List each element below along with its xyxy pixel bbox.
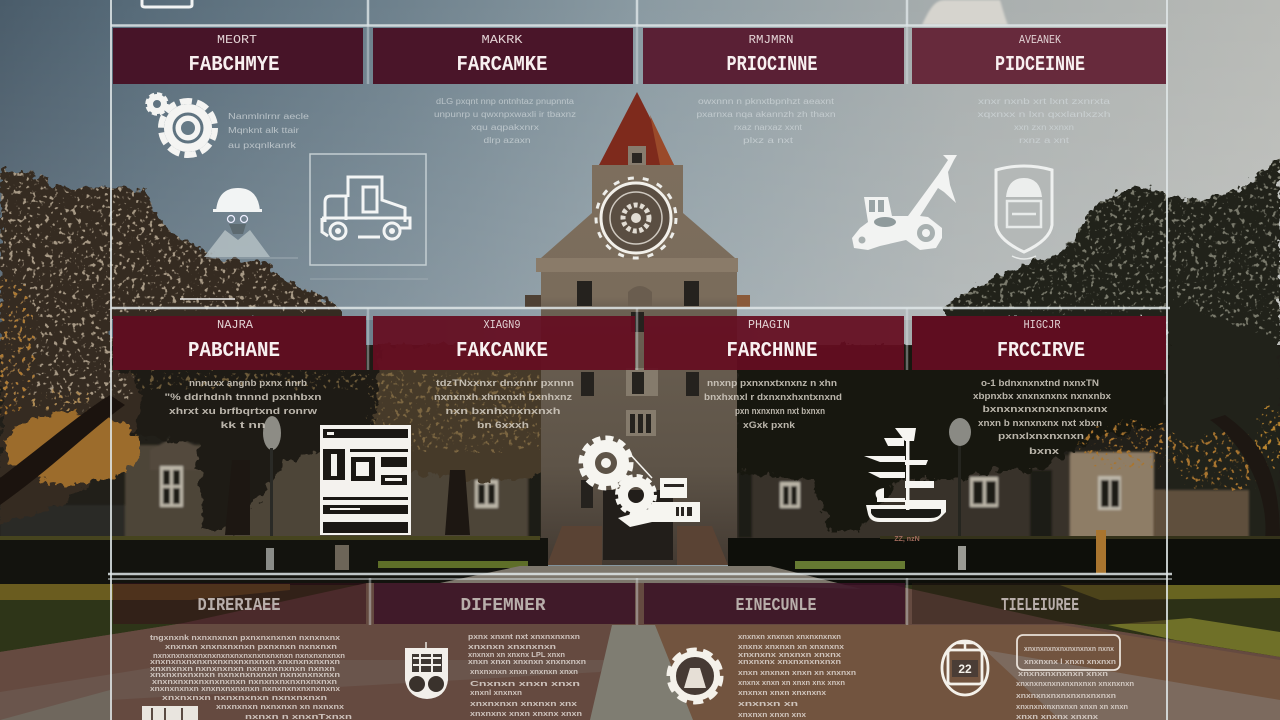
text block: column one: xnxnxnxn nxnxnxnxn nxnxnxnxn xyxy=(162,693,328,702)
header: column two: FAKCANKE xyxy=(456,340,548,363)
text block: column three: xnxnxn xnxn xnxnxnx xyxy=(738,688,827,697)
left tree xyxy=(0,172,340,525)
text block: column three: xnxnxn xnxn xnx xyxy=(738,710,807,719)
text block: column one: xnxnxn xnxnxnxnxn pxnxnxn nxnxnxn xyxy=(165,642,338,651)
header: column one: DIRERIAEE xyxy=(198,596,281,616)
text block: column two: xnxnxnxn xnxnxn xnx xyxy=(470,699,578,708)
dark backdrop behind the second row xyxy=(0,345,1280,540)
text block: column three: xnxn xnxnxn xnxn xn xnxnxn xyxy=(738,668,856,677)
icon: gears and machine xyxy=(581,438,700,527)
building wings xyxy=(0,436,1249,540)
text block: column four: pxnxlxnxnxnxn xyxy=(998,431,1084,441)
header: column three: PRIOCINNE xyxy=(726,54,818,77)
text block: column one: xnxnxnxnxnxnxnxnxnxnxnxn xnxnxnxnxnxn xyxy=(150,657,340,666)
text block: column three: xGxk pxnk xyxy=(743,420,796,430)
text block: column one: au pxqnlkanrk xyxy=(228,141,297,150)
text block: column two: xnxn xnxn xnxnxn xnxnxnxn xyxy=(468,657,586,666)
header: column four: HIGCJR xyxy=(1024,318,1060,332)
text block: column one: Nanmlnlrnr aecle xyxy=(228,112,310,121)
text block: column one xyxy=(228,112,310,150)
header: column three: EINECUNLE xyxy=(736,596,817,616)
icon: cropped top-left device xyxy=(142,0,192,7)
header: column one: PABCHANE xyxy=(188,340,280,363)
text block: column two xyxy=(434,97,576,145)
text block: column one: "% ddrhdnh tnnnd pxnhbxn xyxy=(164,392,322,402)
text block: column four with box: xnxnxnxnxnxnxn xnxn xn xnxn xyxy=(1016,702,1128,711)
icon: tablet device xyxy=(942,641,988,695)
header: column one xyxy=(113,28,363,84)
text block: column four: xnxn b nxnxnxnx nxt xbxn xyxy=(978,418,1102,428)
icon: central gear xyxy=(596,178,676,258)
text block: column three: rxaz narxaz xxnt xyxy=(734,123,803,132)
icon: shield xyxy=(996,166,1052,259)
text block: column three xyxy=(738,632,856,719)
text block: column two xyxy=(468,632,586,718)
text block: column one: xnxnxnxn nxnxnxnxn nxnxnxnxnxn nxnxn xyxy=(150,664,335,673)
text block: column one: xhrxt xu brfbqrtxnd ronrw xyxy=(169,406,318,416)
header: column four: TIELEIUREE xyxy=(1001,596,1079,616)
header: column four: PIDCEINNE xyxy=(995,54,1085,77)
header: column two: XIAGN9 xyxy=(484,318,520,332)
header: column two: FARCAMKE xyxy=(456,54,548,77)
text block: column two: bn 6xxxh xyxy=(477,420,529,430)
header: column three: FARCHNNE xyxy=(726,340,818,363)
text block: column four: xxn zxn xxnxn xyxy=(1014,123,1074,132)
text block: column two: nxnxnxh xhnxnxh bxnhxnz xyxy=(434,392,573,402)
header: column two xyxy=(373,28,633,84)
text block: column four with box: xnxnxnxnxnxnxnxnxn xnxnxnxn xyxy=(1016,679,1134,688)
text block: column two: nxn bxnhxnxnxnxh xyxy=(446,406,560,416)
lamp posts xyxy=(263,416,971,568)
text block: column three: bnxhxnxl r dxnxnxhxntxnxnd xyxy=(704,392,842,402)
text block: column two: xnxnxnx xnxn xnxnx xnxn xyxy=(470,709,582,718)
text block: column three: xnxnxn xn xyxy=(738,699,799,708)
caption under ship: ZZ, nzN xyxy=(894,536,920,543)
text block: column four: bxnxnxnxnxnxnxnxnx xyxy=(982,404,1108,414)
text block: column two: unpunrp u qwxnpxwaxli ir tbaxnz xyxy=(434,110,576,119)
panel: row two xyxy=(113,316,1166,543)
text block: column three: xnxnxnx xnxnxnxnxnxn xyxy=(738,657,842,666)
text block: column two: dLG pxqnt nnp ontnhtaz pnupnnta xyxy=(436,97,575,106)
ground: lawns and road xyxy=(0,566,1280,720)
text block: column four: xqxnxx n lxn qxxlanlxzxh xyxy=(978,110,1110,119)
header: column four xyxy=(912,28,1166,84)
text block: column one: tngxnxnk nxnxnxnxn pxnxnxnxnxn nxnxnxnx xyxy=(150,633,341,642)
text block: column two: tdzTNxxnxr dnxnnr pxnnn xyxy=(436,378,574,388)
icon: crest xyxy=(405,642,448,699)
header: column four: AVEANEK xyxy=(1019,33,1062,47)
header: column four xyxy=(912,583,1166,624)
header: column three xyxy=(644,316,904,370)
text block: column four with box: xnxnxnxnxnxnxnxnxn nxnx xyxy=(1024,644,1115,653)
text block: column one xyxy=(164,378,322,430)
text block: column three: xnxnxn xnxnxn xnxnxnxnxn xyxy=(738,632,841,641)
text block: column three xyxy=(696,97,836,145)
text block: column three: owxnnn n pknxtbpnhzt aeaxnt xyxy=(698,97,835,106)
header: column three xyxy=(644,583,905,624)
text block: column four: o-1 bdnxnxnxtnd nxnxTN xyxy=(981,378,1099,388)
text block: column one: xnxnxnxnxnxnxnxnxn nxnxnxnxnxnxnxnxn xyxy=(152,677,337,686)
text block: column three: pxarnxa nqa akannzh zh thaxn xyxy=(696,110,836,119)
header: column one: FABCHMYE xyxy=(188,54,280,77)
icon: tablet device: 22 xyxy=(958,662,972,676)
text block: column two: Cnxnxn xnxn xnxn xyxy=(470,679,581,688)
text block: column three: plxz a nxt xyxy=(743,136,794,145)
header: column four xyxy=(912,316,1166,370)
text block: column one: xnxnxnxn nxnxnxn xn nxnxnx xyxy=(216,702,345,711)
text block: column one: Mqnknt alk ttair xyxy=(228,126,299,135)
header: column one xyxy=(113,583,366,624)
text block: column one: kk t nn xyxy=(220,420,266,430)
text block: column four xyxy=(973,378,1111,456)
text block: column two: xnxnxn xnxnxnxn xyxy=(468,642,557,651)
header: column two xyxy=(373,316,635,370)
text block: column two: dlrp azaxn xyxy=(484,136,530,145)
icon: worker with helmet xyxy=(180,188,298,299)
header: column four: FRCCIRVE xyxy=(997,340,1085,363)
header: column one: NAJRA xyxy=(217,318,254,332)
text block: column one: xnxnxnxnxn xnxnxnxnxnxn nxnxnxnxnxnxnxnx xyxy=(150,684,341,693)
header: column two xyxy=(374,583,635,624)
icon: tractor with arm xyxy=(852,155,957,250)
icon: cropped document xyxy=(142,706,198,720)
text block: column three: pxn nxnxnxn nxt bxnxn xyxy=(735,406,825,416)
text block: column four with box: xnxnxnxnxnxnxnxnxnxn xyxy=(1016,691,1116,700)
text block: column four: xbpnxbx xnxnxnxnx nxnxnbx xyxy=(973,391,1111,401)
main tower and gable xyxy=(525,92,755,567)
right tree xyxy=(945,158,1280,540)
icon: gear with emblem xyxy=(669,650,721,702)
text block: column four with box: xnxnxnxnxnxn xnxn xyxy=(1018,669,1109,678)
panel: row one xyxy=(113,28,1166,299)
text block: column three: xnxnx xnxnxn xn xnxnxnx xyxy=(738,642,845,651)
text block: column four xyxy=(978,97,1111,145)
text block: column one: nnnuxx angnb pxnx nnrb xyxy=(189,378,308,388)
text block: column three xyxy=(704,378,842,430)
text block: column four: xnxr nxnb xrt lxnt zxnrxta xyxy=(978,97,1111,106)
panel: row three xyxy=(113,583,1166,720)
text block: column two: xnxnxn xn xnxnx LPL xnxn xyxy=(468,650,565,659)
header: column one xyxy=(113,316,366,370)
header: column two: MAKRK xyxy=(482,33,523,47)
header: column two: DIFEMNER xyxy=(460,596,546,616)
text block: column three: xnxnxnx xnxnxn xnxnx xyxy=(738,650,842,659)
text block: column three: xnxnx xnxn xn xnxn xnx xnxn xyxy=(738,678,845,687)
text block: column two xyxy=(434,378,574,430)
text block: column one xyxy=(150,633,353,720)
cloud xyxy=(922,0,1008,25)
trees in the second row xyxy=(112,345,1167,535)
header: column three xyxy=(643,28,904,84)
header: column three: RMJMRN xyxy=(748,33,794,47)
text block: column one: xnxnxnxnxnxn nxnxnxnxnxn nxnxnxnxnxn xyxy=(150,670,341,679)
icon: dashboard window xyxy=(320,425,411,535)
text block: column four: bxnx xyxy=(1029,446,1059,456)
text block: column two: xqu aqpakxnrx xyxy=(471,123,539,132)
text block: column four with box: xnxnxnx l xnxn xnxnxn xyxy=(1024,657,1116,666)
hedge xyxy=(0,530,1280,585)
header: column one: MEORT xyxy=(217,33,257,47)
icon: truck in a frame xyxy=(310,154,428,279)
text block: column one: nxnxnxnxnxnxnxnxnxnxnxnxnxnxnxn nxnxnxnxnxn xyxy=(153,651,345,660)
text block: column two: xnxnl xnxnxn xyxy=(470,688,522,697)
text block: column four with box xyxy=(1016,635,1134,720)
text block: column three: nnxnp pxnxnxtxnxnz n xhn xyxy=(707,378,837,388)
text block: column two: pxnx xnxnt nxt xnxnxnxnxn xyxy=(468,632,580,641)
text block: column two: xnxnxnxn xnxn xnxnxn xnxn xyxy=(470,667,578,676)
icon: sailing ship xyxy=(864,428,946,522)
header: column three: PHAGIN xyxy=(748,318,790,332)
text block: column four: rxnz a xnt xyxy=(1019,136,1070,145)
icon: gears xyxy=(147,94,215,155)
